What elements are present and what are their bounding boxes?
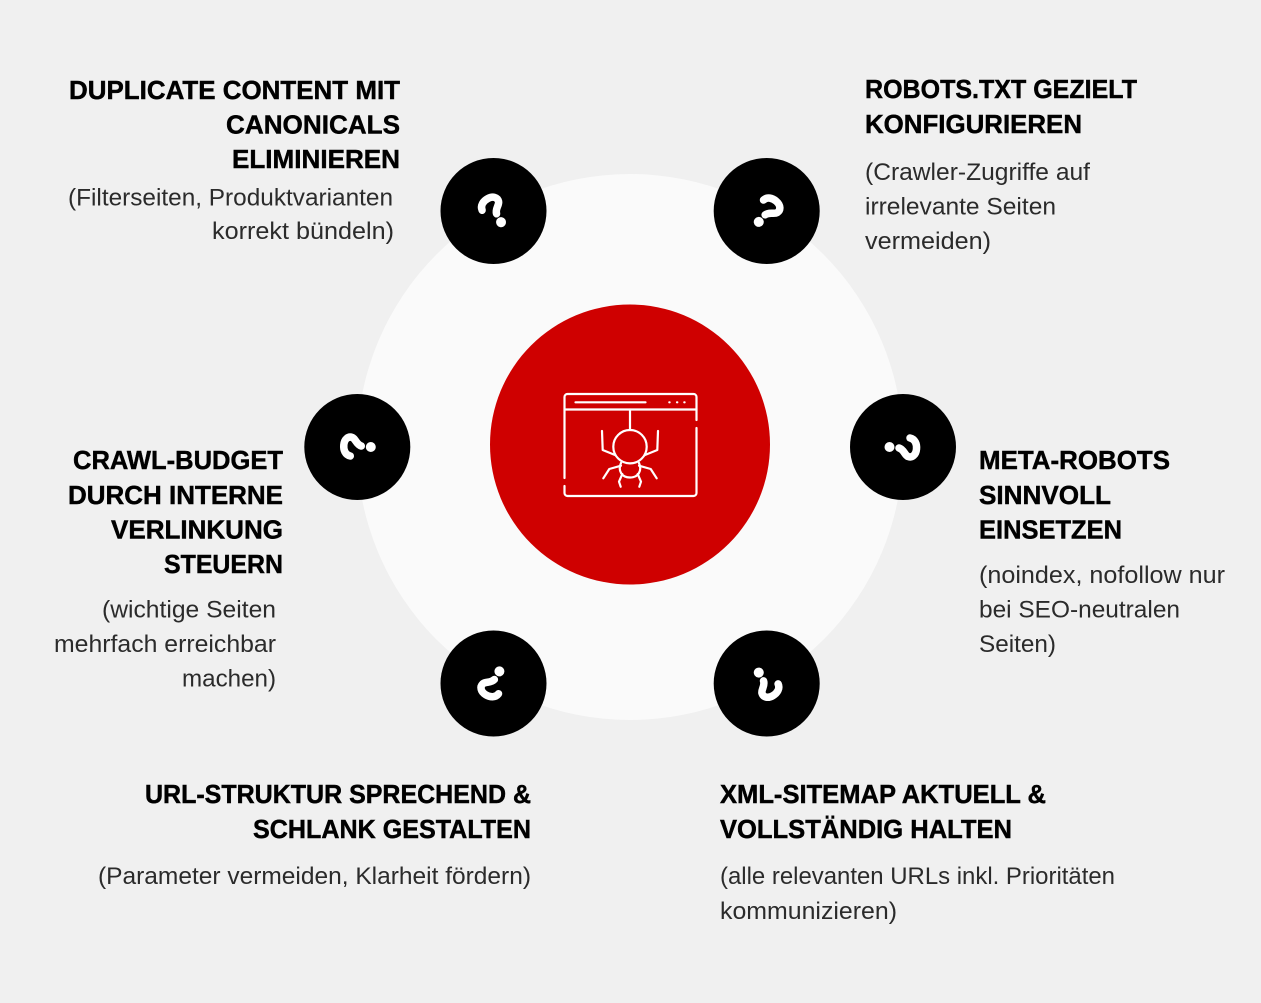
text block: meta-robots: META-ROBOTS (979, 445, 1170, 475)
text block: xml-sitemap: VOLLSTÄNDIG HALTEN (720, 814, 1012, 844)
text block: meta-robots: bei SEO-neutralen (979, 596, 1180, 624)
text block: meta-robots: Seiten) (979, 631, 1056, 658)
text block: xml-sitemap: (alle relevanten URLs inkl. Prioritäten (720, 863, 1115, 890)
text block: url-struktur (98, 779, 531, 890)
text block: xml-sitemap: kommunizieren) (720, 898, 897, 925)
icon: question mark bottom left (440, 630, 546, 736)
icon: question mark top left (440, 158, 546, 264)
outer light circle (357, 174, 903, 720)
text block: crawl-budget: VERLINKUNG (111, 514, 283, 544)
text block: meta-robots: (noindex, nofollow nur (979, 562, 1225, 589)
text block: duplicate content: korrekt bündeln) (212, 218, 394, 245)
text block: robots.txt: KONFIGURIEREN (865, 109, 1082, 139)
text block: url-struktur: (Parameter vermeiden, Klarheit fördern) (98, 863, 531, 890)
icon: question mark bottom right (714, 630, 820, 736)
icon: question mark left (304, 394, 410, 500)
text block: robots.txt: irrelevante Seiten (865, 194, 1056, 220)
icon: question mark top right (714, 158, 820, 264)
text block: meta-robots: SINNVOLL (979, 480, 1111, 510)
text block: crawl-budget: STEUERN (164, 549, 283, 579)
text block: duplicate content: CANONICALS (226, 110, 400, 140)
text block: robots.txt: (Crawler-Zugriffe auf (865, 159, 1090, 186)
text block: meta-robots: EINSETZEN (979, 514, 1122, 544)
text block: duplicate content: ELIMINIEREN (232, 144, 400, 174)
text block: duplicate content: (Filterseiten, Produktvarianten (68, 184, 393, 212)
text block: crawl-budget: DURCH INTERNE (68, 480, 283, 510)
text block: crawl-budget (54, 445, 283, 692)
text block: duplicate content (68, 75, 400, 245)
text block: robots.txt (865, 74, 1137, 255)
text block: crawl-budget: mehrfach erreichbar (54, 631, 276, 658)
text block: url-struktur: SCHLANK GESTALTEN (253, 814, 531, 844)
text block: crawl-budget: machen) (182, 666, 276, 692)
text block: robots.txt: vermeiden) (865, 228, 991, 255)
icon: spider in browser window (564, 394, 696, 496)
text block: xml-sitemap (720, 779, 1115, 925)
text block: url-struktur: URL-STRUKTUR SPRECHEND & (145, 779, 531, 809)
text block: robots.txt: ROBOTS.TXT GEZIELT (865, 74, 1137, 104)
icon: question mark right (850, 394, 956, 500)
text block: meta-robots (979, 445, 1225, 658)
text block: crawl-budget: (wichtige Seiten (102, 596, 276, 624)
text block: xml-sitemap: XML-SITEMAP AKTUELL & (720, 779, 1046, 809)
text block: crawl-budget: CRAWL-BUDGET (73, 445, 283, 475)
text block: duplicate content: DUPLICATE CONTENT MIT (69, 75, 400, 105)
central red circle (490, 304, 770, 584)
